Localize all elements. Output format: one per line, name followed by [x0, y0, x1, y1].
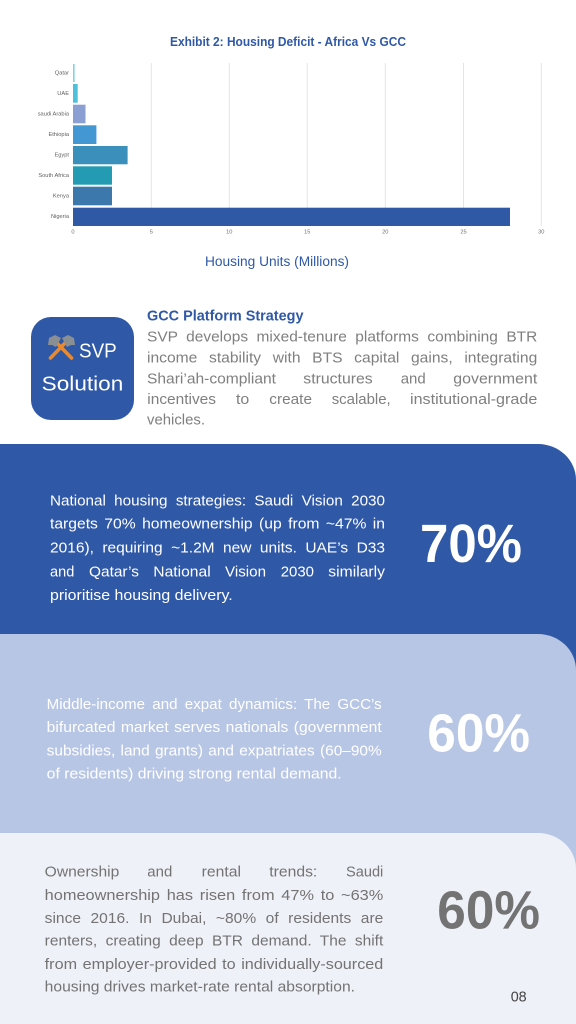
- text block: national housing strategies: similarly: [328, 563, 386, 580]
- axis tick labels: 20: [382, 230, 388, 236]
- axis tick labels: 15: [304, 230, 310, 236]
- axis tick labels: [71, 230, 544, 236]
- panel: ownership and rental trends: [0, 833, 576, 1024]
- text block: national housing strategies: prioritise housing delivery.: [50, 587, 233, 604]
- text block: GCC platform strategy: structures: [303, 370, 373, 387]
- country labels: [38, 70, 70, 220]
- text block: GCC platform strategy: government: [453, 370, 538, 387]
- text block: GCC platform strategy: and: [401, 370, 426, 387]
- text block: GCC platform strategy: vehicles.: [147, 412, 205, 429]
- text block: national housing strategies: Vision: [225, 563, 266, 580]
- country labels: Kenya: [53, 194, 70, 200]
- country labels: Qatar: [55, 70, 69, 76]
- axis title: Housing Units (Millions): [205, 254, 349, 269]
- text block: ownership and rental trends: from employer-provided to individually-sourced: [45, 956, 383, 973]
- axis tick labels: 25: [460, 230, 467, 236]
- text block: middle-income and expat dynamics: bifurcated market serves nationals (government: [47, 719, 383, 736]
- text block: ownership and rental trends: rental: [202, 864, 241, 881]
- axis tick labels: 0: [71, 230, 75, 236]
- bar: Qatar: [73, 64, 75, 82]
- country labels: Ethiopia: [48, 132, 70, 138]
- text block: GCC platform strategy: to: [236, 391, 249, 408]
- country labels: South Africa: [38, 173, 70, 179]
- text block: ownership and rental trends: trends:: [269, 864, 317, 881]
- bar chart: housing deficit by country: [38, 63, 544, 236]
- bar: UAE: [73, 84, 78, 103]
- stat: 60%: 60%: [437, 880, 540, 940]
- text block: national housing strategies: Qatar’s: [89, 563, 139, 580]
- bar: Saudi Arabia: [73, 105, 86, 123]
- chart title: Exhibit 2: Housing Deficit - Africa Vs GCC: [170, 35, 406, 49]
- country labels: Egypt: [54, 152, 69, 158]
- text block: middle-income and expat dynamics: Middle-income and expat dynamics: The GCC’s: [47, 696, 382, 713]
- axis tick labels: 10: [226, 230, 232, 236]
- text block: ownership and rental trends: housing drives market-rate rental absorption.: [45, 979, 355, 996]
- badge: SVP Solution: [31, 317, 134, 420]
- heading: GCC Platform Strategy: GCC Platform Strategy: [147, 308, 304, 325]
- text block: GCC platform strategy: institutional-grade: [410, 391, 537, 408]
- text block: national housing strategies: [50, 493, 386, 604]
- text block: ownership and rental trends: Ownership: [45, 864, 119, 881]
- panel: middle-income and expat dynamics: [0, 634, 576, 900]
- bar: Ethiopia: [73, 125, 96, 144]
- text block: GCC platform strategy: income stability with BTS capital gains, integrating: [147, 349, 537, 366]
- bar: Egypt: [73, 146, 128, 164]
- icon: crossed hammers: [48, 335, 75, 358]
- text block: GCC platform strategy: scalable,: [332, 391, 391, 408]
- text block: ownership and rental trends: renters, creating deep BTR demand. The shift: [45, 933, 384, 950]
- bar: South Africa: [73, 166, 112, 185]
- panel: national housing strategies: [0, 444, 576, 700]
- text block: national housing strategies: 2016), requiring ~1.2M new units. UAE’s D33: [50, 540, 385, 557]
- text block: middle-income and expat dynamics: of residents) driving strong rental demand.: [47, 765, 342, 782]
- stat: 60%: 60%: [427, 704, 530, 764]
- bar: Kenya: [73, 187, 112, 205]
- text block: GCC platform strategy: Shari’ah-compliant: [147, 370, 277, 387]
- text block: GCC platform strategy: create: [269, 391, 312, 408]
- country labels: saudi Arabia: [38, 112, 70, 118]
- text block: ownership and rental trends: [45, 864, 384, 996]
- text block: GCC platform strategy: incentives: [147, 391, 216, 408]
- text block: national housing strategies: National: [153, 563, 211, 580]
- badge: SVP Solution: SVP: [79, 339, 117, 362]
- text block: national housing strategies: targets 70% homeownership (up from ~47% in: [50, 516, 385, 533]
- text block: middle-income and expat dynamics: subsidies, land grants) and expatriates (60–90%: [47, 743, 382, 760]
- country labels: UAE: [57, 91, 69, 97]
- country labels: Nigeria: [51, 214, 70, 220]
- text block: GCC platform strategy: [147, 328, 538, 429]
- text block: national housing strategies: National housing strategies: Saudi Vision 2030: [50, 493, 385, 510]
- axis tick labels: 30: [538, 230, 544, 236]
- text block: ownership and rental trends: Saudi: [346, 864, 383, 881]
- bar: Nigeria: [73, 208, 510, 226]
- text block: ownership and rental trends: homeownership has risen from 47% to ~63%: [45, 887, 383, 904]
- stat: 70%: 70%: [420, 514, 522, 574]
- text block: middle-income and expat dynamics: [47, 696, 383, 782]
- text block: GCC platform strategy: SVP develops mixed-tenure platforms combining BTR: [147, 328, 537, 345]
- text block: national housing strategies: and: [50, 563, 74, 580]
- text block: ownership and rental trends: since 2016. In Dubai, ~80% of residents are: [45, 910, 383, 927]
- badge: SVP Solution: Solution: [42, 373, 123, 396]
- page number: 08: [511, 989, 527, 1006]
- text block: ownership and rental trends: and: [147, 864, 172, 881]
- axis tick labels: 5: [150, 230, 153, 236]
- text block: national housing strategies: 2030: [281, 563, 314, 580]
